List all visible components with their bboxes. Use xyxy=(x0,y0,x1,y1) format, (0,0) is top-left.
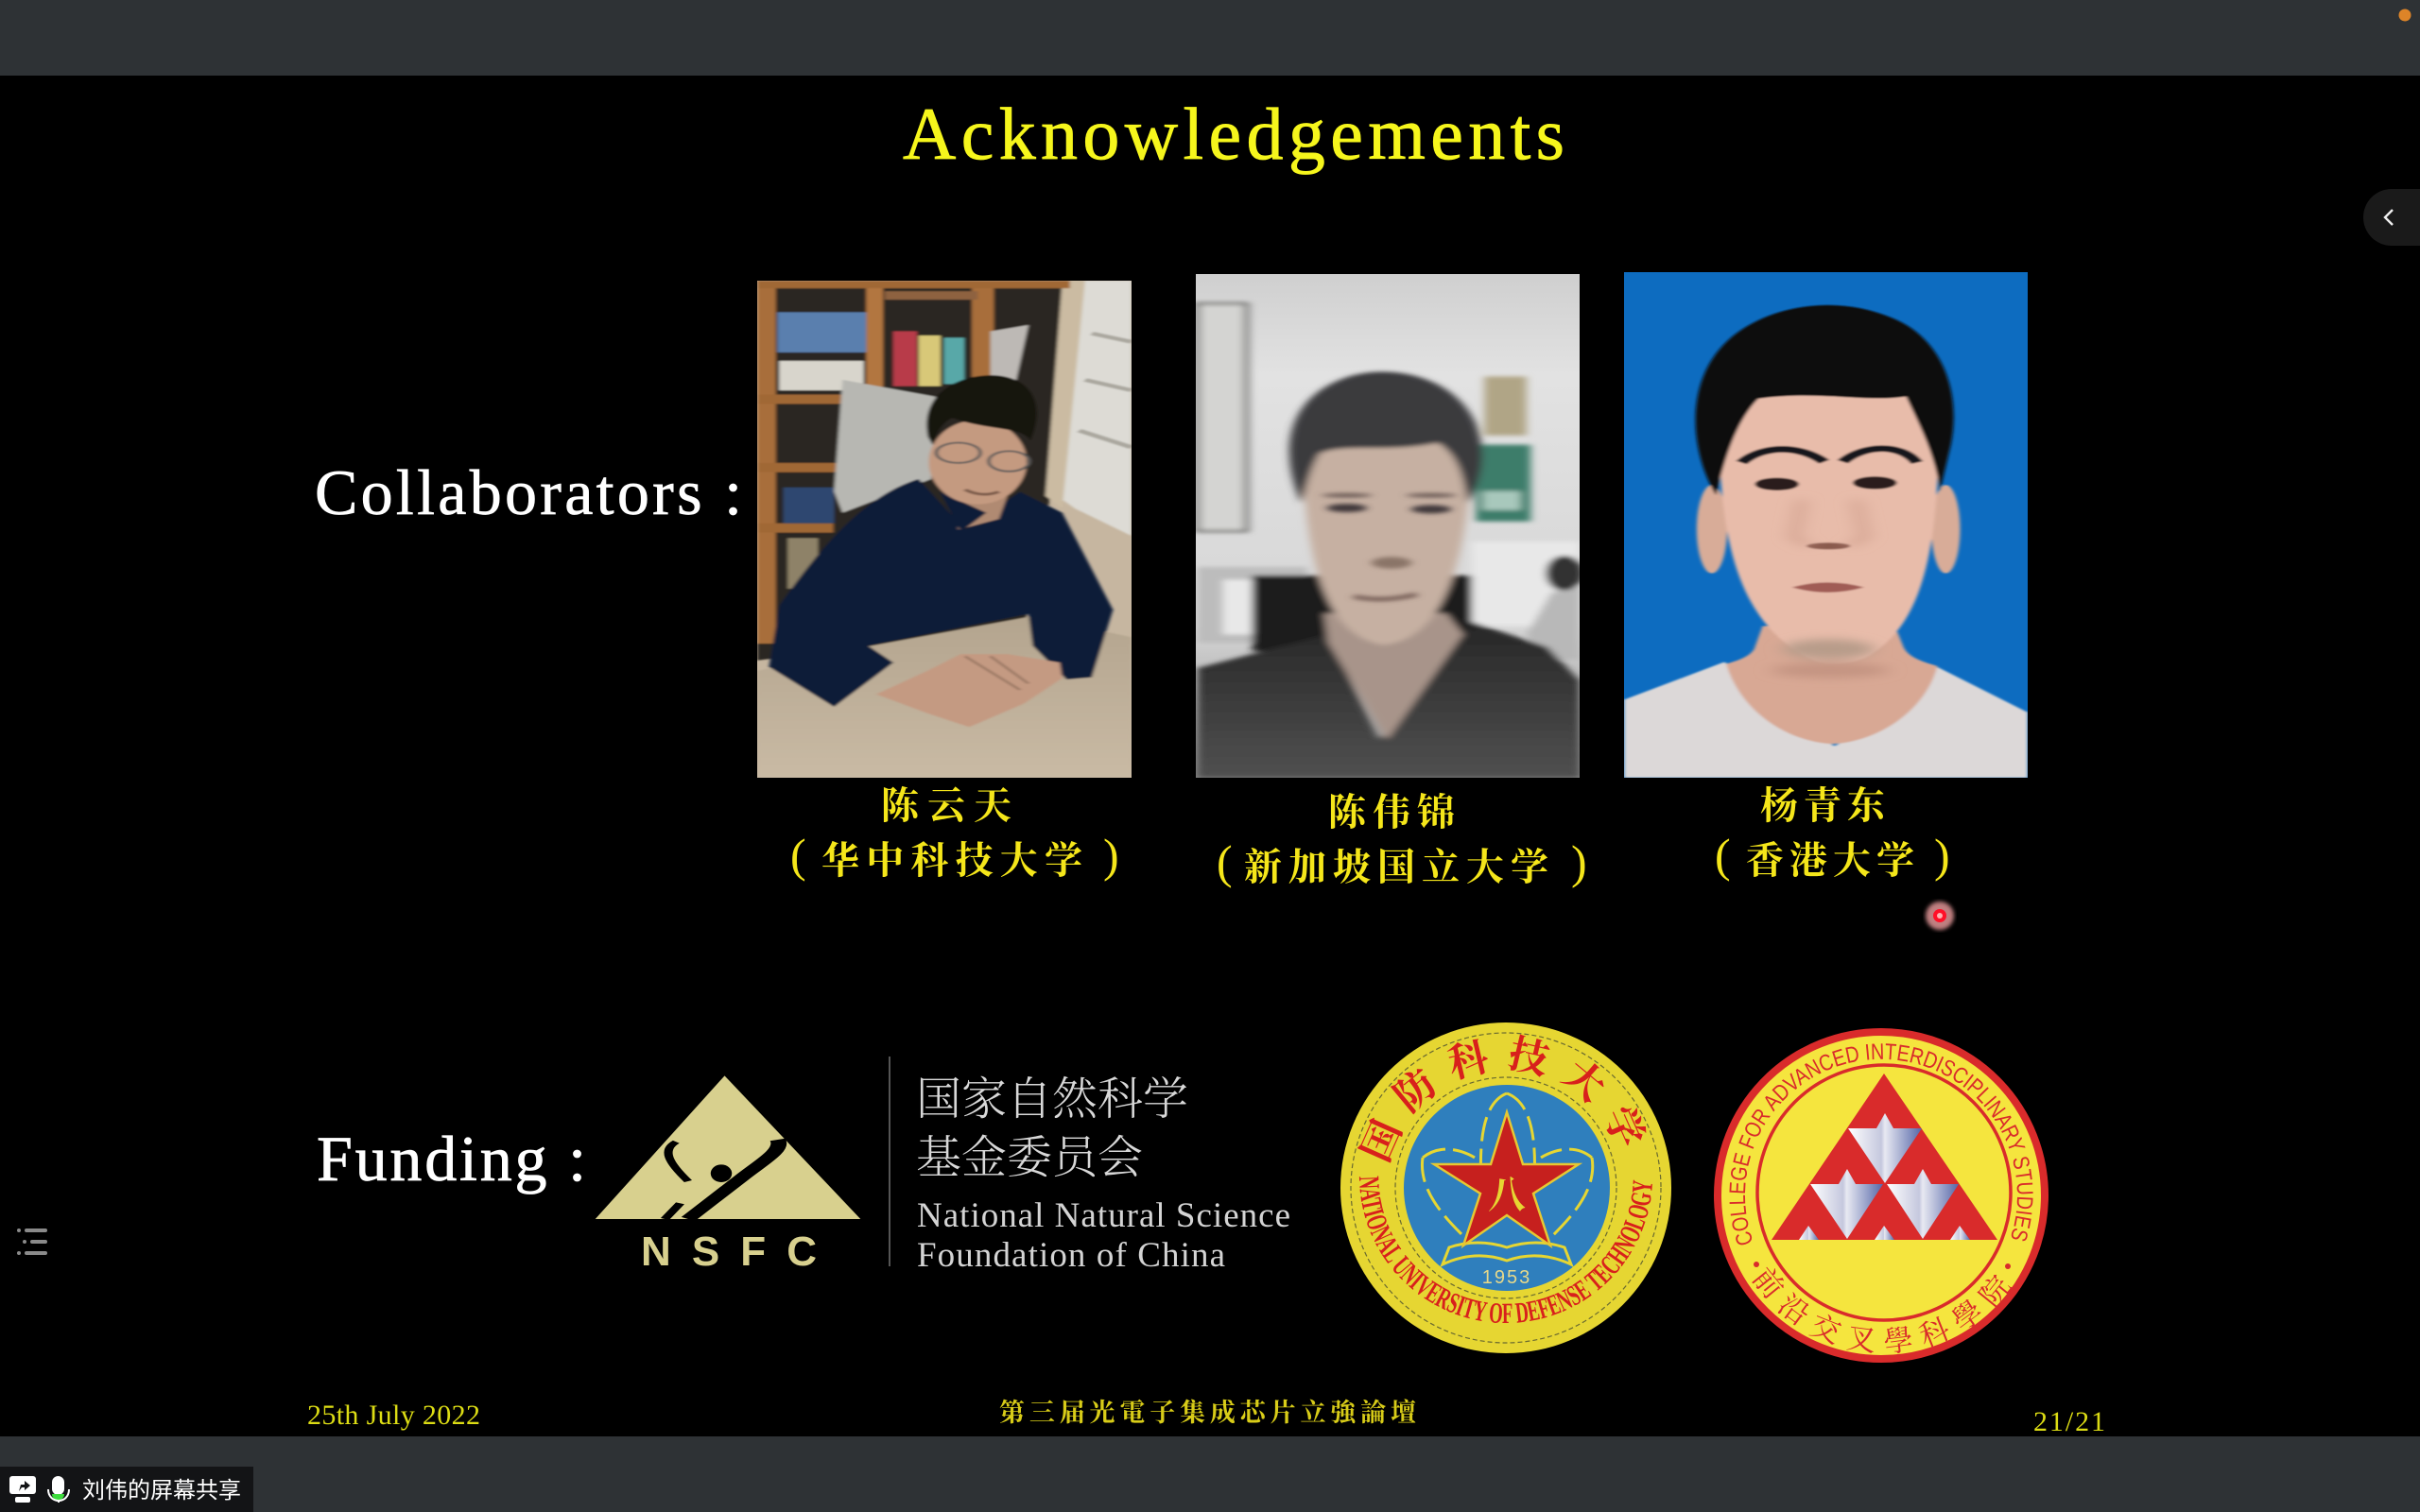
heading: collaborators: Collaborators : xyxy=(315,456,742,528)
photo: 陈云天 xyxy=(757,281,1132,778)
photo: 陈伟锦 xyxy=(1196,274,1580,778)
wreath outlines xyxy=(1422,1093,1593,1238)
NSFC english name xyxy=(917,1196,1290,1275)
chinese arc name: 国防科技大学 xyxy=(1357,1034,1647,1163)
star xyxy=(1434,1112,1579,1246)
caption: 陈云天 华中科技大学: 华中科技大学 xyxy=(821,839,1089,882)
NSFC chinese name: 国家自然科学 xyxy=(916,1074,1188,1125)
bottom toolbar xyxy=(0,1436,2420,1512)
laser pointer xyxy=(1926,902,1954,930)
caption: 杨青东 香港大学: ( xyxy=(1715,829,1731,882)
NSFC english name: Foundation of China xyxy=(917,1236,1225,1275)
icon: microphone xyxy=(48,1476,69,1503)
caption: 陈云天 华中科技大学: ( xyxy=(790,829,806,882)
footer: conference name: 第三届光電子集成芯片立強論壇 xyxy=(999,1399,1416,1427)
english arc name: COLLEGE FOR ADVANCED INTERDISCIPLINARY STUDIES xyxy=(1730,1043,2033,1246)
NSFC triangle emblem xyxy=(596,1075,860,1219)
english arc name: NATIONAL UNIVERSITY OF DEFENSE TECHNOLOGY xyxy=(1359,1176,1652,1323)
caption: 杨青东 香港大学 xyxy=(1715,784,1950,882)
footer: page number: 21/21 xyxy=(2033,1406,2105,1437)
recording indicator dot xyxy=(2399,9,2411,21)
divider xyxy=(889,1057,890,1266)
presenter label: 刘伟的屏幕共享 xyxy=(82,1478,241,1503)
side panel toggle tab xyxy=(2363,189,2420,246)
photo: 杨青东 xyxy=(1624,272,2028,778)
caption: 陈伟锦 新加坡国立大学: 新加坡国立大学 xyxy=(1244,846,1555,888)
NSFC letters: NSFC xyxy=(641,1228,817,1275)
arc dots xyxy=(1754,1262,2011,1269)
caption: 陈伟锦 新加坡国立大学: ) xyxy=(1571,835,1587,888)
title: Acknowledgements xyxy=(903,93,1564,175)
logo: National University of Defense Technology xyxy=(1340,1022,1671,1353)
caption: 陈伟锦 新加坡国立大学 xyxy=(1217,791,1587,888)
icon: screen share xyxy=(9,1476,36,1503)
caption: 陈伟锦 新加坡国立大学: ( xyxy=(1217,835,1233,888)
heading: funding: Funding : xyxy=(317,1123,586,1194)
caption: 陈云天 华中科技大学: 陈云天 xyxy=(881,784,1020,827)
NSFC chinese name xyxy=(916,1074,1188,1183)
triangle mark xyxy=(1772,1074,1997,1240)
screen share badge xyxy=(0,1467,253,1512)
caption: 陈云天 华中科技大学: ) xyxy=(1103,829,1119,882)
caption: 杨青东 香港大学: 香港大学 xyxy=(1746,839,1920,882)
silver facets xyxy=(1799,1113,1970,1240)
NSFC english name: National Natural Science xyxy=(917,1196,1290,1235)
outline menu icon xyxy=(17,1228,47,1255)
founding year: 1953 xyxy=(1482,1267,1531,1288)
caption: 陈云天 华中科技大学 xyxy=(790,784,1119,882)
caption: 杨青东 香港大学: ) xyxy=(1934,829,1950,882)
caption: 杨青东 香港大学: 杨青东 xyxy=(1760,784,1891,827)
logo: NSFC xyxy=(596,1057,1290,1275)
star numeral: 八 xyxy=(1488,1174,1526,1216)
logo: College for Advanced Interdisciplinary Studies xyxy=(1714,1028,2048,1363)
NSFC chinese name: 基金委员会 xyxy=(916,1133,1143,1183)
top toolbar xyxy=(0,0,2420,76)
book xyxy=(1443,1243,1571,1264)
caption: 陈伟锦 新加坡国立大学: 陈伟锦 xyxy=(1328,791,1461,833)
chinese arc name: 前沿交叉學科學院 xyxy=(1752,1266,2012,1353)
footer: date: 25th July 2022 xyxy=(307,1400,480,1431)
